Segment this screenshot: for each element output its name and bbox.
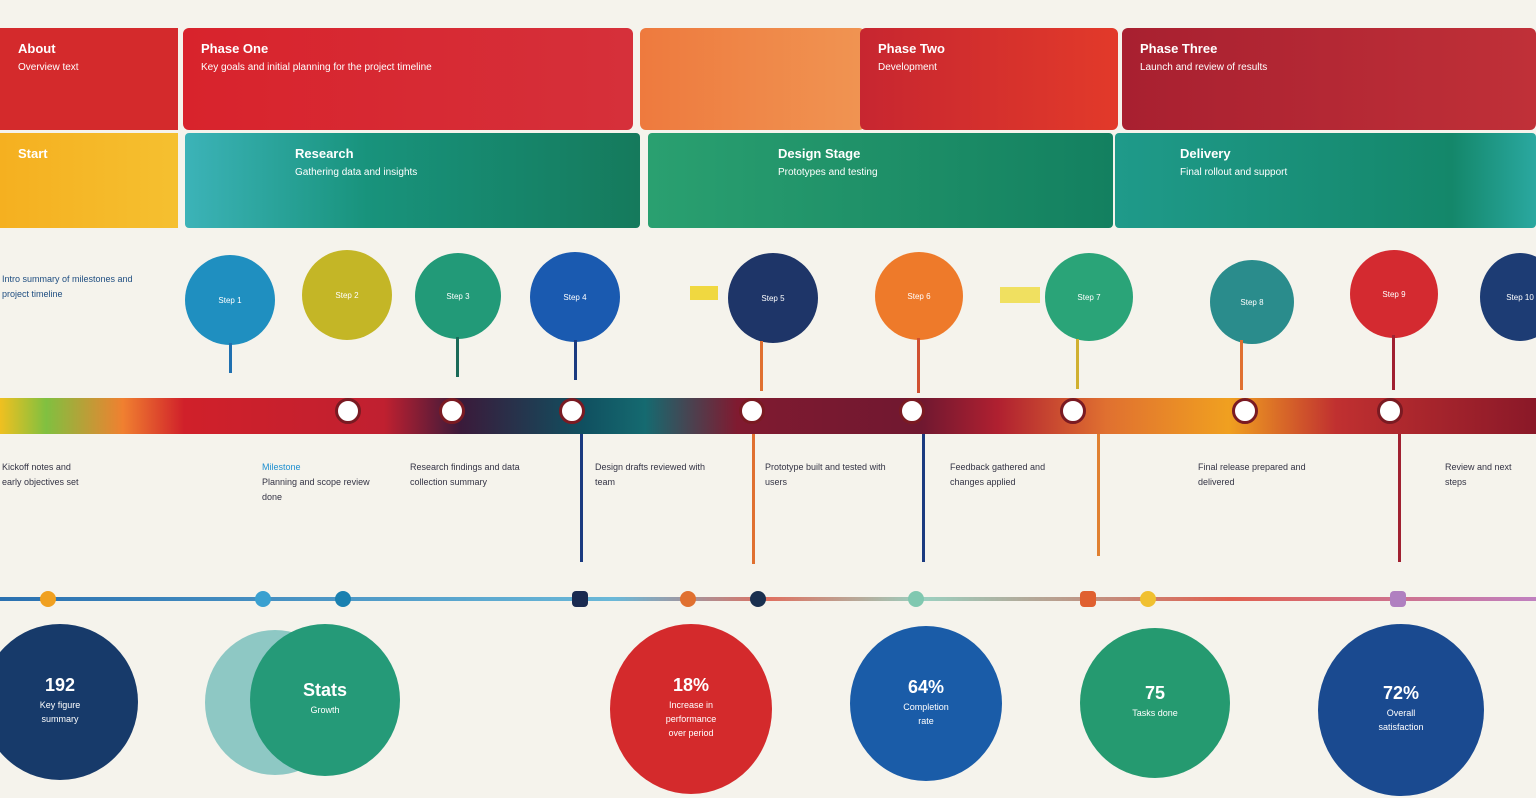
pin 7 bbox=[1045, 253, 1133, 341]
circle: navy bbox=[0, 624, 138, 780]
banner: red 3: Development bbox=[878, 62, 937, 73]
circle: green: Stats bbox=[303, 680, 347, 700]
text: Planning and scope review done bbox=[262, 477, 370, 502]
pin 7: Step 7 bbox=[1077, 292, 1101, 302]
banner: red 3 bbox=[860, 28, 1118, 130]
circle: blue: Completion bbox=[903, 702, 949, 712]
banner: red 2: Key goals and initial planning for the project timeline bbox=[201, 62, 432, 73]
banner: teal: Research bbox=[295, 146, 354, 161]
circle: navy: summary bbox=[41, 714, 78, 724]
banner: red 1 bbox=[0, 28, 178, 130]
circle: dark blue bbox=[1318, 624, 1484, 796]
pin 10: Step 10 bbox=[1506, 292, 1534, 302]
pin 3: Step 3 bbox=[446, 292, 470, 300]
timeline bar bbox=[0, 398, 1536, 434]
banner: dark red: Phase Three bbox=[1140, 41, 1217, 56]
banner: teal-green bbox=[1115, 133, 1536, 228]
banner: orange bbox=[640, 28, 865, 130]
bottom circles bbox=[0, 624, 1484, 796]
banner: red 2 bbox=[183, 28, 633, 130]
banner: teal bbox=[185, 133, 640, 228]
banner: green: Design Stage bbox=[778, 146, 860, 161]
pin 9 bbox=[1350, 250, 1438, 338]
pin 5 bbox=[728, 253, 818, 343]
pin 8: Step 8 bbox=[1240, 298, 1264, 306]
lower timeline line bbox=[0, 597, 1536, 601]
circle: red: over period bbox=[668, 728, 714, 738]
banner: red 2: Phase One bbox=[201, 41, 268, 56]
circle: green 2: Tasks done bbox=[1132, 708, 1178, 718]
text: Prototype built and tested with users bbox=[765, 462, 886, 487]
pin 5: Step 5 bbox=[761, 294, 785, 302]
pin 10 bbox=[1480, 253, 1536, 341]
circle: dark blue: satisfaction bbox=[1378, 722, 1424, 732]
circle: teal light bbox=[205, 630, 345, 775]
banner: green bbox=[648, 133, 1113, 228]
pin 6: Step 6 bbox=[907, 292, 931, 300]
banner: red 3: Phase Two bbox=[878, 41, 945, 56]
circle: navy: Key figure bbox=[40, 700, 80, 710]
banner: teal: Gathering data and insights bbox=[295, 167, 417, 178]
pin 1: Step 1 bbox=[218, 296, 242, 304]
text columns: Kickoff notes and early objectives set bbox=[2, 462, 79, 487]
circle: dark blue: 72% bbox=[1383, 683, 1419, 703]
circle: green: Growth bbox=[310, 705, 340, 715]
pin 9: Step 9 bbox=[1382, 290, 1406, 298]
banner: green: Prototypes and testing bbox=[778, 167, 878, 178]
banner: red 1: About bbox=[18, 41, 56, 56]
circle: dark blue: Overall bbox=[1387, 708, 1415, 718]
text: Review and next steps bbox=[1445, 462, 1512, 487]
circle: green 2: 75 bbox=[1145, 683, 1165, 703]
text: Research findings and data collection summary bbox=[410, 462, 520, 487]
pin 2 bbox=[302, 250, 392, 340]
circle: red: 18% bbox=[673, 675, 709, 695]
timeline nodes bbox=[335, 398, 361, 424]
yellow accents bbox=[690, 286, 718, 300]
circle: green bbox=[250, 624, 400, 776]
banner: red 1: Overview text bbox=[18, 62, 79, 73]
left intro text: Intro summary of milestones and project timeline bbox=[2, 274, 133, 299]
circle: blue bbox=[850, 626, 1002, 781]
pin 3 bbox=[415, 253, 501, 339]
banner: dark red: Launch and review of results bbox=[1140, 62, 1267, 73]
text: Final release prepared and delivered bbox=[1198, 462, 1306, 487]
second banner row bbox=[0, 133, 1536, 228]
markers bbox=[40, 591, 56, 607]
pin 8 bbox=[1210, 260, 1294, 344]
banner: teal-green: Delivery bbox=[1180, 146, 1231, 161]
descenders bbox=[580, 434, 583, 562]
circle: blue: 64% bbox=[908, 676, 944, 696]
pin 4: Step 4 bbox=[563, 292, 587, 302]
circle: navy: 192 bbox=[45, 675, 75, 695]
banner: yellow bbox=[0, 133, 178, 228]
banner: dark red bbox=[1122, 28, 1536, 130]
circle: red bbox=[610, 624, 772, 794]
pin 6 bbox=[875, 252, 963, 340]
pin 4 bbox=[530, 252, 620, 342]
text: Design drafts reviewed with team bbox=[595, 462, 705, 487]
text: Milestone bbox=[262, 462, 301, 472]
banner: teal-green: Final rollout and support bbox=[1180, 167, 1287, 178]
text: Feedback gathered and changes applied bbox=[950, 462, 1045, 487]
pin 2: Step 2 bbox=[335, 290, 359, 300]
circle: red: performance bbox=[666, 714, 716, 724]
circle: blue: rate bbox=[918, 716, 934, 726]
pins row bbox=[185, 250, 1536, 393]
circle: green 2 bbox=[1080, 628, 1230, 778]
pin 1 bbox=[185, 255, 275, 345]
banner: yellow: Start bbox=[18, 146, 48, 161]
circle: red: Increase in bbox=[669, 700, 713, 710]
top banner row bbox=[0, 28, 1536, 130]
